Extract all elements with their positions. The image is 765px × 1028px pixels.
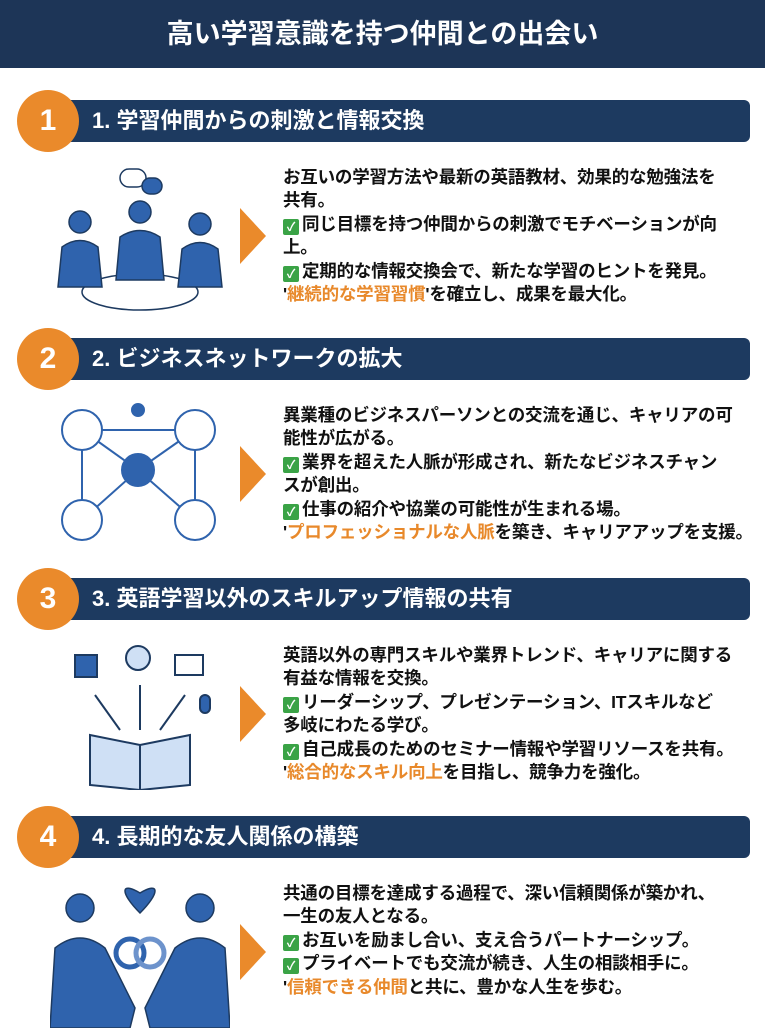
text block 3: リーダーシップ、プレゼンテーション、ITスキルなど (302, 692, 713, 712)
text block 2 (283, 405, 753, 542)
text block 2: ✓ (287, 458, 295, 472)
text block 2: 異業種のビジネスパーソンとの交流を通じ、キャリアの可 (283, 405, 733, 425)
panel: section 2 (17, 328, 753, 542)
text block 2: 業界を超えた人脈が形成され、新たなビジネスチャン (302, 452, 717, 472)
header bar 3: 3. 英語学習以外のスキルアップ情報の共有 (92, 586, 512, 611)
number badge 3: 3 (40, 582, 56, 615)
text block 2: スが創出。 (283, 475, 370, 495)
panel: section 1 (17, 90, 750, 311)
text block 3: '総合的なスキル向上を目指し、競争力を強化。 (283, 762, 650, 782)
icon: book and skills (74, 645, 211, 790)
text block 1: 共有。 (283, 190, 335, 210)
text block 4: ✓ (287, 959, 295, 973)
number badge 4 (17, 806, 79, 868)
arrow (240, 208, 266, 264)
text block 3: 自己成長のためのセミナー情報や学習リソースを共有。 (302, 739, 734, 759)
panel: section 4 (17, 806, 750, 1028)
text block 1: ✓ (287, 267, 295, 281)
number badge 1: 1 (40, 104, 56, 137)
text block 3: 英語以外の専門スキルや業界トレンド、キャリアに関する (283, 645, 732, 665)
text block 1: 定期的な情報交換会で、新たな学習のヒントを発見。 (302, 261, 716, 281)
text block 4 (283, 883, 715, 997)
header bar 3 (60, 578, 750, 620)
header bar 4 (60, 816, 750, 858)
text block 1: '継続的な学習習慣'を確立し、成果を最大化。 (283, 284, 637, 304)
title (0, 0, 765, 68)
icon: meeting people (57, 168, 223, 311)
text block 3: ✓ (287, 698, 295, 712)
text block 3: ✓ (287, 745, 295, 759)
text block 1: 上。 (283, 237, 318, 257)
header bar 2 (60, 338, 750, 380)
header bar 2: 2. ビジネスネットワークの拡大 (92, 346, 402, 371)
text block 1: お互いの学習方法や最新の英語教材、効果的な勉強法を (283, 167, 716, 187)
text block 3: 多岐にわたる学び。 (283, 715, 439, 735)
text block 2: ✓ (287, 505, 295, 519)
number badge 3 (17, 568, 79, 630)
header bar 1: 1. 学習仲間からの刺激と情報交換 (92, 108, 424, 133)
text block 1 (283, 167, 717, 304)
text block 3: 有益な情報を交換。 (283, 668, 439, 688)
text block 2: 'プロフェッショナルな人脈を築き、キャリアアップを支援。 (283, 522, 753, 542)
number badge 2: 2 (40, 342, 56, 375)
text block 4: ✓ (287, 936, 295, 950)
icon: handshake (50, 888, 230, 1028)
number badge 2 (17, 328, 79, 390)
panel: section 3 (17, 568, 750, 790)
arrow (240, 686, 266, 742)
text block 2: 仕事の紹介や協業の可能性が生まれる場。 (302, 499, 631, 519)
title: 高い学習意識を持つ仲間との出会い (167, 19, 598, 49)
number badge 4: 4 (40, 820, 56, 853)
text block 1: 同じ目標を持つ仲間からの刺激でモチベーションが向 (302, 214, 717, 234)
text block 4: プライベートでも交流が続き、人生の相談相手に。 (302, 953, 699, 973)
arrow (240, 924, 266, 980)
text block 4: '信頼できる仲間と共に、豊かな人生を歩む。 (283, 977, 632, 997)
arrow (240, 446, 266, 502)
text block 4: お互いを励まし合い、支え合うパートナーシップ。 (302, 930, 699, 950)
header bar 1 (60, 100, 750, 142)
text block 4: 一生の友人となる。 (283, 906, 438, 926)
text block 1: ✓ (287, 220, 295, 234)
header bar 4: 4. 長期的な友人関係の構築 (92, 824, 358, 849)
icon: network (61, 403, 216, 541)
number badge 1 (17, 90, 79, 152)
text block 2: 能性が広がる。 (283, 428, 404, 448)
text block 4: 共通の目標を達成する過程で、深い信頼関係が築かれ、 (283, 883, 715, 903)
text block 3 (283, 645, 734, 782)
